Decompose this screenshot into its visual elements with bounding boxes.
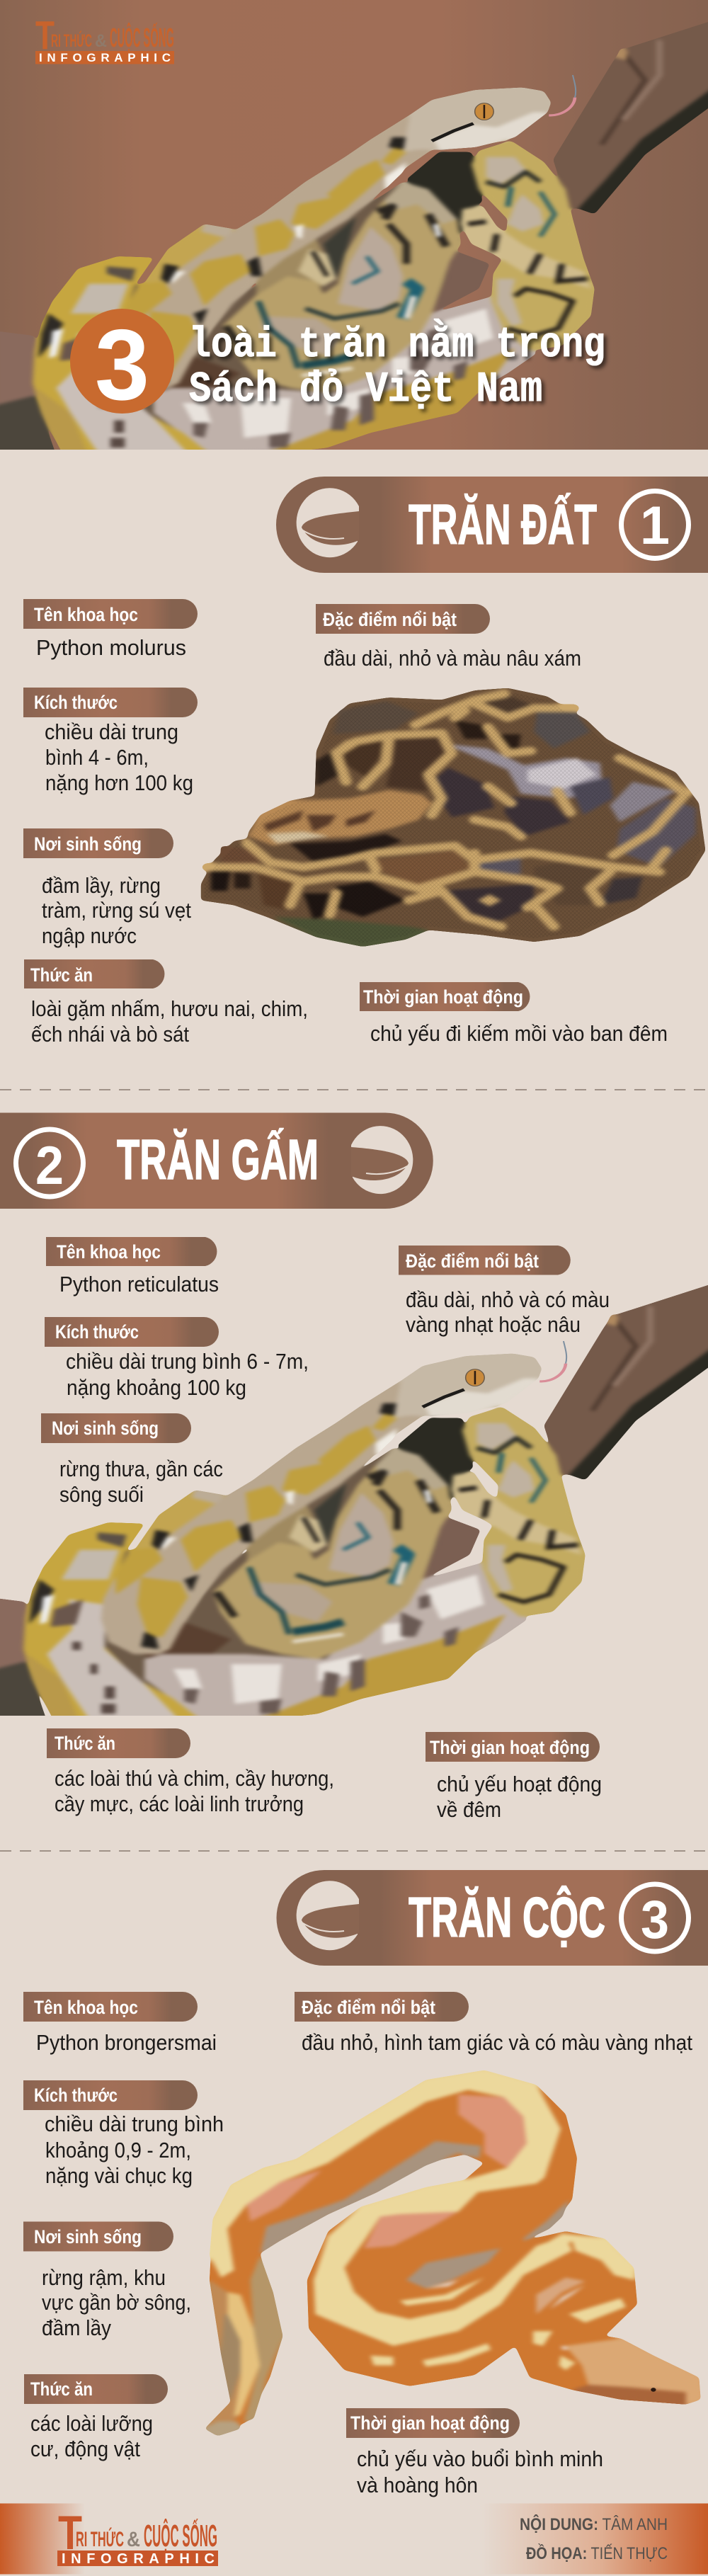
label: Tên khoa học: Tên khoa học [34,1997,138,2018]
label: Nơi sinh sống: Nơi sinh sống [34,2226,142,2247]
text: food [55,1766,334,1816]
cream bands [210,2070,634,2370]
number 1: 1 [640,496,670,556]
text: food [31,996,308,1047]
panel: Trăn Gấm facts [41,1237,610,1822]
text: size: bình 4 - 6m, [45,745,149,770]
label: Nơi sinh sống [41,1413,191,1443]
number badge [70,309,174,421]
grey underside [260,2141,569,2289]
hero panel [0,0,708,455]
label: Nơi sinh sống: Nơi sinh sống [52,1418,159,1439]
logo: & [127,2528,140,2551]
second hole [426,2263,488,2289]
logo: INFOGRAPHIC [62,2551,215,2567]
text: scientific name: Python molurus [36,635,186,660]
footer: CUỘC SỐNG [144,2517,217,2553]
text: size: chiều dài trung [45,719,178,744]
icon: snake head [297,1881,359,1950]
text: size [45,2111,224,2188]
banner: TRĂN CỘC: TRĂN CỘC [409,1886,605,1949]
hero snake photo [0,16,708,455]
banner: TRĂN GẤM: TRĂN GẤM [117,1128,319,1191]
label: Thức ăn: Thức ăn [30,2378,93,2400]
text: habitat [42,2265,191,2340]
text: habitat [59,1457,223,1507]
label: Kích thước: Kích thước [34,2085,118,2106]
label: Thức ăn [24,2374,168,2404]
text: features: vàng nhạt hoặc nâu [406,1312,581,1337]
head [566,2339,700,2405]
label: Đặc điểm nổi bật [295,1992,469,2022]
label: Kích thước [23,2080,198,2110]
pink tones [247,2095,527,2248]
label: Kích thước: Kích thước [55,1321,139,1343]
number 2 [16,1129,84,1197]
text: features [406,1287,610,1337]
label: Thức ăn [47,1728,190,1758]
text: scientific name: Python reticulatus [59,1272,219,1296]
banner: TRĂN ĐẤT: TRĂN ĐẤT [409,493,597,556]
label: Đặc điểm nổi bật [316,604,490,634]
text: habitat: tràm, rừng sú vẹt [42,898,191,923]
logo: RI THỨC [76,2527,124,2551]
label: Tên khoa học: Tên khoa học [57,1241,161,1263]
label: Kích thước: Kích thước [34,692,118,713]
text: habitat: đầm lầy, rừng [42,873,161,898]
text: food: các loài thú và chim, cầy hương, [55,1766,334,1791]
number 3: 3 [641,1890,669,1950]
label: Thức ăn: Thức ăn [30,964,93,986]
label: Tên khoa học [23,599,198,629]
label: Thức ăn: Thức ăn [55,1733,115,1754]
credit: graphics: ĐỒ HỌA: TIẾN THỰC [526,2543,668,2563]
label: Thức ăn [24,959,164,988]
logo: Tri Thuc & Cuoc Song [35,13,174,64]
number 2: 2 [35,1136,64,1196]
label: Kích thước [23,688,198,717]
text: active time [437,1772,602,1822]
text: habitat: rừng rậm, khu [42,2265,166,2290]
text: habitat: sông suối [59,1482,144,1507]
text: active time: chủ yếu đi kiếm mồi vào ban đêm [370,1021,668,1046]
text: habitat: đầm lầy [42,2315,111,2340]
title: Sách đỏ Việt Nam [189,366,542,414]
text: size [45,719,193,795]
banner: TRĂN CỘC [276,1870,708,1966]
text: active time: về đêm [437,1797,501,1822]
label: Tên khoa học [46,1237,217,1266]
label: Thời gian hoạt động [426,1732,600,1762]
panel: Trăn Cộc facts [23,1992,700,2497]
label: Tên khoa học: Tên khoa học [34,604,138,625]
text: size: chiều dài trung bình 6 - 7m, [66,1349,309,1374]
icon: snake head [297,488,359,557]
text: food: cầy mực, các loài linh trưởng [55,1791,304,1816]
label: Thời gian hoạt động: Thời gian hoạt động [363,986,523,1008]
title: loài trăn nằm trong [189,319,605,370]
text: habitat: rừng thưa, gần các [59,1457,223,1481]
label: Thời gian hoạt động: Thời gian hoạt động [430,1737,590,1758]
text: features: đầu dài, nhỏ và màu nâu xám [324,646,581,671]
text: size: khoảng 0,9 - 2m, [45,2138,191,2162]
text: food: ếch nhái và bò sát [31,1022,189,1047]
label: Đặc điểm nổi bật: Đặc điểm nổi bật [406,1250,539,1272]
label: Tên khoa học [23,1992,198,2022]
banner: TRĂN GẤM [0,1113,433,1209]
text: size: chiều dài trung bình [45,2111,224,2136]
panel: Trăn Đất facts [23,599,705,1047]
text: active time: và hoàng hôn [357,2473,478,2497]
credit: content: NỘI DUNG: TÂM ANH [520,2514,668,2534]
text: active time: chủ yếu vào buổi bình minh [357,2446,603,2471]
label: Đặc điểm nổi bật: Đặc điểm nổi bật [323,609,457,630]
text: size: nặng hơn 100 kg [45,770,193,795]
head [249,790,432,845]
text: food [30,2411,153,2461]
number 3 [622,1884,688,1951]
logo [57,2506,218,2567]
number badge: 3 [95,309,149,421]
logo: Tri Thuc & Cuoc Song: T [35,13,55,58]
label: Thời gian hoạt động [346,2408,520,2438]
text: habitat: ngập nước [42,923,137,948]
logo: Tri Thuc & Cuoc Song: RI THỨC [51,30,92,51]
icon: snake head [351,1126,413,1194]
text: size: nặng khoảng 100 kg [67,1375,246,1400]
hero panel: CUỘC SỐNG [110,21,174,53]
text: food: cư, động vật [30,2437,140,2461]
label: Nơi sinh sống [23,2222,173,2252]
label: Nơi sinh sống: Nơi sinh sống [34,833,142,855]
banner: TRĂN ĐẤT [276,477,708,573]
text: size: nặng vài chục kg [45,2163,193,2188]
label: Thời gian hoạt động [360,982,530,1011]
image: Burmese python [201,688,705,947]
text: size [66,1349,309,1400]
text: scientific name: Python brongersmai [36,2030,217,2055]
text: food: các loài lưỡng [30,2411,153,2436]
footer [0,2504,708,2575]
image: reticulated python [0,1282,708,1721]
lower tail [205,2280,260,2436]
text: active time [357,2446,603,2497]
logo: Tri Thuc & Cuoc Song: INFOGRAPHIC [39,51,171,64]
text: features: đầu dài, nhỏ và có màu [406,1287,610,1312]
label: Thời gian hoạt động: Thời gian hoạt động [350,2412,510,2434]
label: Đặc điểm nổi bật [399,1246,571,1275]
number 1 [622,491,688,558]
label: Kích thước [45,1317,219,1347]
logo: T [58,2506,82,2560]
text: food: loài gặm nhấm, hươu nai, chim, [31,996,308,1021]
label: Đặc điểm nổi bật: Đặc điểm nổi bật [302,1997,435,2018]
text: habitat [42,873,191,948]
title [189,319,605,414]
text: habitat: vực gần bờ sông, [42,2290,191,2315]
image: blood python [205,2070,700,2436]
text: active time: chủ yếu hoạt động [437,1772,602,1796]
label: Nơi sinh sống [23,828,173,858]
logo: Tri Thuc & Cuoc Song: & [95,31,107,51]
